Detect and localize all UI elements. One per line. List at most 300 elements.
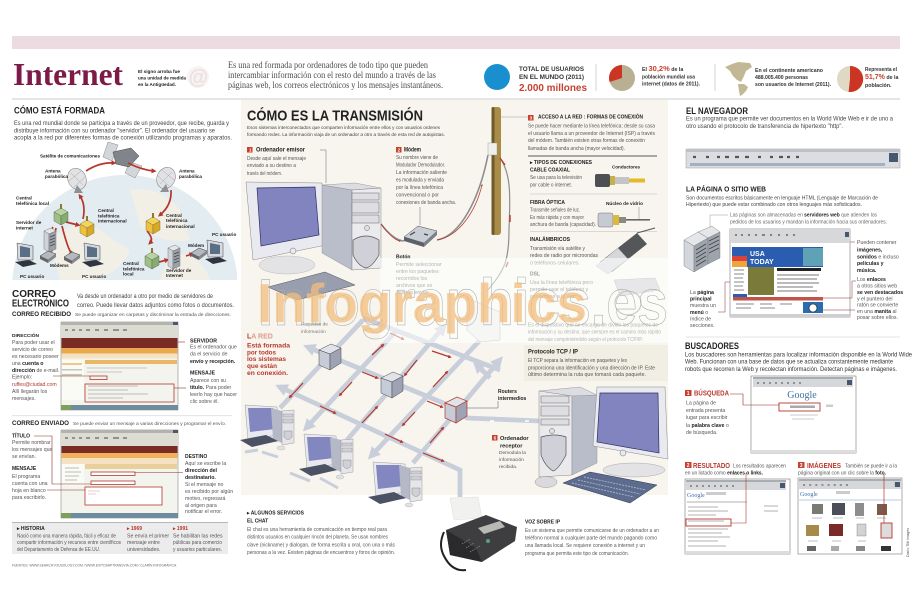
screenshot: inbox xyxy=(61,322,178,410)
text: el chat: El chat es una herramienta de comunicación en tiempo real para xyxy=(247,527,387,533)
step 1: búsqueda xyxy=(685,388,779,436)
step 2: módem text: es modulada y enviada xyxy=(396,178,444,184)
connection: inalámbricos: INALÁMBRICOS xyxy=(530,236,571,243)
diagram labels: internacional xyxy=(166,224,195,229)
text: links: se ven destacados xyxy=(857,290,903,296)
screenshot: compose xyxy=(61,430,178,518)
callout: título xyxy=(12,432,52,460)
step 3: access text: el usuario llama a un proveedor de Internet (ISP) a través xyxy=(528,131,655,137)
text: home page: índice de xyxy=(690,316,711,322)
connection: fibra óptica: FIBRA ÓPTICA xyxy=(530,198,565,206)
la red label: que están xyxy=(247,363,277,370)
stat: Americas users: 488.005.400 personas xyxy=(755,75,808,81)
callout: mensaje: El programa xyxy=(12,474,40,480)
diagram labels: Central xyxy=(166,213,182,218)
heading: EL NAVEGADOR xyxy=(686,106,748,117)
router text: Es el dispositivo que se encarga de dividir los paquetes de xyxy=(528,322,658,328)
screenshot: google home: Google xyxy=(787,390,817,401)
subheading: correo enviado: Se puede enviar un mensaje a varias direcciones y programar el envío. xyxy=(73,421,226,427)
network: client computers xyxy=(240,405,422,507)
1991 milestone xyxy=(172,526,223,553)
1969 milestone xyxy=(126,526,169,553)
panel: buscadores xyxy=(685,341,913,557)
leader lines xyxy=(34,436,183,490)
screenshot: results xyxy=(685,473,790,554)
connection: fibra óptica xyxy=(530,198,650,228)
step 3: access text: 3 xyxy=(530,116,533,121)
diagram labels: PC usuario xyxy=(20,274,44,279)
callout: destino: dirección del xyxy=(185,468,218,474)
callout: servidor: Es el ordenador que xyxy=(190,344,237,350)
text: voz sobre IP: VOZ SOBRE IP xyxy=(525,520,561,526)
connection: DSL xyxy=(530,272,660,315)
red link arrows xyxy=(50,163,192,262)
step 1: búsqueda: 1 xyxy=(687,391,690,397)
diagram labels: Internet xyxy=(16,226,33,230)
utility pole xyxy=(488,107,528,235)
router text: información y su destino, que siempre es el camino más rápido xyxy=(528,330,661,336)
text xyxy=(686,196,878,208)
text: contents: películas y xyxy=(857,261,884,267)
icon: parabolic antennas xyxy=(64,164,179,193)
callout: mensaje xyxy=(12,466,48,501)
text: el chat: clave (nickname) y dialogan, de forma escrita u oral, con una o más xyxy=(247,542,395,548)
historia text: Nació como una manera rápida, fácil y eficaz de xyxy=(17,534,116,540)
1969 milestone: universidades. xyxy=(127,547,160,553)
icon: blue circle xyxy=(484,64,510,90)
building box at end of route xyxy=(467,298,500,342)
step 2: resultado xyxy=(685,462,786,476)
1969 milestone: Se envía el primer xyxy=(127,534,169,540)
diagram labels: Central xyxy=(123,261,139,266)
diagram labels: Internet xyxy=(166,273,183,278)
keyboard xyxy=(268,272,355,300)
text xyxy=(686,116,894,130)
connection: fibra óptica: anchura de banda (capacidad). xyxy=(530,222,596,228)
stat: total users xyxy=(484,64,587,94)
mouse xyxy=(535,476,557,488)
connection: fibra óptica: Es más rápida y con mayor xyxy=(530,215,584,221)
text: links: posar sobre ellos. xyxy=(857,315,898,321)
callout: título: TÍTULO xyxy=(12,432,30,440)
callout: servidor xyxy=(190,338,237,365)
text: voz sobre IP: Es un sistema que permite comunicarse de un ordenador a un xyxy=(525,528,659,534)
intro: formando redes. La información viaja de un ordenador a otro a través de esta red de autopistas. xyxy=(247,132,445,138)
tower xyxy=(539,387,597,398)
globe xyxy=(12,175,237,280)
step 1: búsqueda: entrada presenta xyxy=(686,408,725,414)
screenshot: news page: TODAY xyxy=(750,259,774,266)
text: el chat: ▸ ALGUNOS SERVICIOS xyxy=(246,510,305,516)
stat: world share pie xyxy=(609,64,701,91)
intro text: intercambiar información con el resto del mundo a través de las xyxy=(228,70,436,81)
step 1: búsqueda: lugar para escribir xyxy=(686,415,728,421)
step 2: resultado: en un listado como enlaces o links. xyxy=(685,470,764,476)
icon: map of the Americas xyxy=(725,62,752,96)
text: voz sobre IP: programa que permita este tipo de comunicación. xyxy=(525,551,629,557)
intro paragraph xyxy=(14,120,232,142)
label: routers intermedios: intermedios xyxy=(498,396,527,402)
router text: del mensaje comprimiéndolo según el protocolo TCP/IP. xyxy=(528,337,643,343)
step 2: módem text: Modulador Demodulador. xyxy=(396,162,445,168)
icon: at sign: @ xyxy=(188,67,208,89)
heading: LA PÁGINA O SITIO WEB xyxy=(686,184,767,194)
connection: cable coaxial: CABLE COAXIAL xyxy=(530,168,570,174)
callout: dirección: es necesario poseer xyxy=(12,354,59,360)
diagram: satellite network xyxy=(12,142,237,280)
callout: mensaje: MENSAJE xyxy=(12,466,37,472)
panel: protocolo TCP/IP xyxy=(524,345,668,381)
photo credit: Diario TMI Images xyxy=(906,528,910,557)
text: Son documentos escritos básicamente en lenguaje HTML (Lenguaje de Marcación de xyxy=(686,196,878,202)
text: otro usando el protocolo de transferencia de hipertexto "http". xyxy=(686,124,843,130)
1991 milestone: y usuarios particulares. xyxy=(173,547,222,553)
text: contents xyxy=(857,240,899,274)
step 3: access text xyxy=(528,113,655,152)
callout: destino: es recibido por algún xyxy=(185,489,233,495)
text: links xyxy=(857,277,903,321)
text xyxy=(685,352,913,373)
big computer: sender xyxy=(246,182,381,300)
callout: mensaje: MENSAJE xyxy=(190,370,216,376)
heading: CORREO xyxy=(12,289,56,300)
connection: inalámbricos: Transmisión vía satélite y xyxy=(530,246,585,252)
step 1: ordenador emisor text: través del módem. xyxy=(247,171,282,177)
connection: inalámbricos: o teléfonos celulares. xyxy=(530,260,580,266)
heading xyxy=(12,289,69,310)
subheading: correo recibido xyxy=(12,311,231,318)
intro paragraph: acopla a la red por diferentes formas de conexión utilizando programas y aparatos. xyxy=(14,134,232,142)
diagram labels: Satélite de comunicaciones xyxy=(40,154,100,158)
connection: cable coaxial xyxy=(529,160,645,188)
text: contents: música. xyxy=(857,268,877,274)
step 1: búsqueda: la palabra clave o xyxy=(686,423,729,429)
connection: DSL: permite usar el teléfono y xyxy=(530,287,589,293)
icon: modem xyxy=(404,226,437,247)
diagram labels: Módem xyxy=(188,243,204,248)
text: home page: principal xyxy=(690,296,712,302)
text: servers: Las páginas son almacenadas en servidores web que atienden los xyxy=(730,212,877,218)
diagram labels: Servidor de xyxy=(166,268,192,273)
icon: fiber cable xyxy=(598,207,650,227)
step: ordenador receptor text: Ordenador xyxy=(500,436,529,442)
diagram labels: parabólica xyxy=(45,174,68,179)
text: contents: sonidos e incluso xyxy=(857,254,899,260)
step: ordenador receptor text: Demodula la xyxy=(499,450,526,456)
tower xyxy=(322,183,381,190)
text: links: Los enlaces xyxy=(857,277,886,283)
cable from pole xyxy=(487,158,510,291)
big computer: receiver xyxy=(490,387,668,503)
callout: mensaje: cuenta con una xyxy=(12,481,48,487)
step 1: búsqueda: La página de xyxy=(686,400,716,406)
text: voz sobre IP: una llamada local. Se requiere conexión a internet y un xyxy=(525,543,645,549)
stat: Americas users: En el continente americano xyxy=(755,68,824,74)
label: botón: entre los paquetes xyxy=(396,269,439,275)
icon: coaxial cable xyxy=(595,174,645,187)
la red label: Está formada xyxy=(247,342,291,350)
callout: dirección: Ejemplo: xyxy=(12,374,32,380)
text: links: en una manita al xyxy=(857,309,897,315)
stat: total users: EN EL MUNDO (2011) xyxy=(519,74,584,81)
screenshot: news page: USA xyxy=(750,251,765,258)
label: botón: recorridos los xyxy=(396,276,428,282)
network: gray routes xyxy=(280,318,540,497)
text: servers: pedidos de los usuarios y mandan la información hacia sus ordenadores. xyxy=(730,220,887,226)
watermark: Infographics xyxy=(257,272,587,334)
router text xyxy=(528,322,661,343)
diagram labels: Central xyxy=(16,196,32,200)
callout: destino: motivo, regresará xyxy=(185,496,225,502)
route dashes xyxy=(490,420,529,422)
label: botón: Permite seleccionar xyxy=(396,262,442,268)
diagram labels: Servidor de xyxy=(16,220,42,225)
text: Hipertexto) que puede estar combinado con otros lenguajes más sofisticados. xyxy=(686,202,862,208)
connection: fibra óptica: Transmite señales de luz. xyxy=(530,208,580,214)
stat: Americas users xyxy=(755,68,831,88)
screenshot: news page xyxy=(730,229,850,317)
label: routers intermedios xyxy=(467,389,527,408)
callout: mensaje: Aparece con su xyxy=(190,378,226,384)
intro xyxy=(77,293,234,309)
icon: fax machine xyxy=(441,497,517,570)
connection: cable coaxial: Se usa para la televisión xyxy=(530,175,582,181)
step: ordenador receptor text: información xyxy=(499,457,524,463)
text: contents: imágenes, xyxy=(857,248,883,254)
la red label: LA RED xyxy=(247,334,273,340)
connection: inalámbricos xyxy=(530,228,655,274)
base xyxy=(259,256,315,274)
1969 milestone: ▸ 1969 xyxy=(126,526,142,532)
callout: mensaje: título. Para poder xyxy=(190,385,232,391)
text: Es un programa que permite ver documentos en la World Wide Web e ir de uno a xyxy=(686,116,894,122)
text: links: ratón se convierte xyxy=(857,302,898,308)
callout: destino: Si el mensaje no xyxy=(185,482,223,488)
label: paquetes de información: información xyxy=(301,329,326,335)
historia text: del Departamento de Defensa de EE.UU. xyxy=(17,547,100,553)
la red label: en conexión. xyxy=(247,370,288,377)
callout: dirección: DIRECCIÓN xyxy=(12,331,39,339)
text: home page xyxy=(690,290,716,329)
screenshot: browser bar xyxy=(686,149,900,168)
step 2: módem text: Su nombre viene de xyxy=(396,155,438,161)
diagram labels: telefónica xyxy=(123,266,145,272)
intro text: Es una red formada por ordenadores de todo tipo que pueden xyxy=(228,60,428,71)
panel: protocolo TCP/IP: Protocolo TCP / IP xyxy=(528,348,578,356)
text: voz sobre IP: teléfono normal a cualquier parte del mundo pagando como xyxy=(525,536,657,542)
step 3: imágenes: También se puede ir a la xyxy=(845,464,897,470)
monitor xyxy=(593,387,668,459)
text: voz sobre IP xyxy=(525,520,659,557)
intro paragraph: distribuye información con su ordenador "servidor". El ordenador del usuario se xyxy=(14,128,215,134)
diagram labels: telefónica local xyxy=(16,201,49,206)
panel: la página o sitio web xyxy=(684,184,903,329)
step: ordenador receptor text: 5 xyxy=(494,436,497,441)
diagram labels: PC usuario xyxy=(82,274,106,279)
diagram labels: internacional xyxy=(98,218,127,224)
step 2: resultado: 2 xyxy=(687,463,690,469)
step 3: imágenes: 3 xyxy=(800,463,803,469)
callout: dirección: Para poder usar el xyxy=(12,340,55,346)
step 1: ordenador emisor text: Desde aquí sale el mensaje xyxy=(247,156,306,162)
1991 milestone: ▸ 1991 xyxy=(172,526,188,532)
label: botón: desean enviar. xyxy=(396,290,430,296)
intro: Esos sistemas interconectados que comparten información entre ellos y con usuarios ordenes xyxy=(247,125,441,131)
satellite xyxy=(103,142,142,178)
text: links: a otros sitios web xyxy=(857,284,897,290)
step 2: módem text xyxy=(396,146,456,206)
screenshot: image results xyxy=(798,473,902,554)
panel: el navegador xyxy=(686,106,900,168)
callout: dirección: Allí llegarán los xyxy=(12,389,48,395)
icon: web servers xyxy=(684,215,728,272)
step: ordenador receptor text: recibida. xyxy=(499,464,517,470)
text: links: y el puntero del xyxy=(857,296,892,302)
label: paquetes de información xyxy=(301,322,328,335)
text: home page: muestra un xyxy=(690,303,716,309)
stat: world share pie: población mundial usa xyxy=(642,74,695,80)
icon: splitter xyxy=(614,278,660,315)
step 1: búsqueda: de búsqueda. xyxy=(686,430,717,436)
intro paragraph: Es una red mundial donde se participa a través de un proveedor, que recibe, guarda y xyxy=(14,120,230,127)
callout: dirección: servicio de correo xyxy=(12,347,53,353)
callout: mensaje: hoja en blanco xyxy=(12,488,46,494)
screenshot: results: Google xyxy=(687,493,705,499)
callout: dirección xyxy=(12,331,59,402)
callout: mensaje: para escribirlo. xyxy=(12,495,46,501)
callout: destino: destinatario. xyxy=(185,475,216,481)
step 3: access text: ACCESO A LA RED : FORMAS DE CONEXIÓN xyxy=(538,113,643,121)
subheading: correo enviado: CORREO ENVIADO xyxy=(12,420,69,427)
text: servers xyxy=(730,212,887,226)
callout: mensaje: clic sobre él. xyxy=(190,399,219,405)
note: arroba origin: El signo arroba fue xyxy=(138,69,180,74)
leader lines xyxy=(53,342,186,388)
heading: CÓMO ESTÁ FORMADA xyxy=(14,104,105,116)
callout: servidor: da el servicio de xyxy=(190,352,228,358)
historia text xyxy=(16,526,121,553)
step 3: imágenes xyxy=(798,461,897,476)
intro: correo. Puede llevar datos adjuntos como fotos o documentos. xyxy=(77,302,234,309)
label: routers intermedios: Routers xyxy=(498,389,517,395)
step 1: ordenador emisor text xyxy=(247,146,306,177)
note: arroba origin: una unidad de medida xyxy=(138,76,186,80)
diagram labels: Módems xyxy=(50,263,69,268)
stat: Americas share pie: Representa el xyxy=(865,67,897,73)
callout: dirección: dirección de e-mail. xyxy=(12,368,59,374)
step 3: imágenes: IMÁGENES xyxy=(807,461,841,470)
callout: destino xyxy=(185,454,233,515)
la red label: los sistemas xyxy=(247,356,287,363)
text: el chat: personas a la vez. Existen páginas de encuentros y foros de opinión. xyxy=(247,550,395,556)
diagram labels: telefónica xyxy=(98,214,120,218)
heading: CÓMO ES LA TRANSMISIÓN xyxy=(247,107,423,125)
step 1: ordenador emisor text: Ordenador emisor xyxy=(256,146,305,154)
heading: ELECTRÓNICO xyxy=(12,296,69,310)
text: Web. Funcionan con una base de datos que se actualiza constantemente mediante xyxy=(685,360,894,366)
connection: DSL: Usa la línea telefónica pero xyxy=(530,280,593,286)
callout: destino: notificar el error. xyxy=(185,509,222,515)
sources: FUENTES: WWW.SEARCHYOUSOLOGY.COM / WWW.EXITOSAPTRANSVIA.COM / CLARÍN INFOGRÁFICA. xyxy=(12,564,177,568)
stat: world share pie: internet (datos de 2011). xyxy=(642,82,701,88)
stat: Americas share pie: población. xyxy=(865,83,892,89)
subheading: correo recibido: CORREO RECIBIDO xyxy=(12,311,71,318)
step 1: búsqueda: BÚSQUEDA xyxy=(694,388,729,398)
diagram labels: parabólica xyxy=(179,174,202,179)
panel: protocolo TCP/IP: último determina la ruta que tomará cada paquete. xyxy=(528,372,646,378)
text: el chat xyxy=(246,510,395,556)
step 3: access text: llamadas de banda ancha (mayor velocidad). xyxy=(528,146,625,152)
connection: DSL: conectarse a la vez. xyxy=(530,294,576,300)
connection: cable coaxial: Conductores xyxy=(612,164,640,170)
callout: destino: Aquí se escribe la xyxy=(185,461,226,467)
screenshot: image results: Google xyxy=(800,492,818,498)
historia text: ▸ HISTORIA xyxy=(16,526,45,532)
panel: correo electrónico xyxy=(12,289,237,568)
panel: cómo es la transmisión xyxy=(240,107,668,570)
top pink band xyxy=(12,36,900,49)
callout: título: los mensajes que xyxy=(12,447,52,453)
step 2: módem text: 2 xyxy=(398,148,401,153)
connection: fibra óptica: Núcleo de vidrio xyxy=(606,201,643,206)
intro: Va desde un ordenador a otro por medio de servidores de xyxy=(77,293,213,300)
intro xyxy=(247,125,445,138)
connection: cable coaxial: ▸ TIPOS DE CONEXIONES xyxy=(529,160,593,166)
step 2: módem text: convencional o por xyxy=(396,192,439,198)
1991 milestone: Se habilitan las redes xyxy=(173,534,223,540)
text: home page: secciones. xyxy=(690,323,715,329)
connection: inalámbricos: redes de radio por microondas xyxy=(530,253,598,259)
historia text: compartir información y recursos entre científicos xyxy=(17,540,121,546)
text: home page: La página xyxy=(690,290,714,296)
callout: título: Permite nombrar xyxy=(12,440,51,446)
label: botón: archivos que se xyxy=(396,283,432,289)
diagram labels: Antena xyxy=(45,168,61,174)
step: ordenador receptor text xyxy=(492,435,529,470)
cable with modem xyxy=(381,155,488,247)
note: arroba origin: en la Antigüedad. xyxy=(138,82,176,87)
stat label: TOTAL DE USUARIOS xyxy=(519,66,584,73)
diagram labels: PC usuario xyxy=(212,232,236,237)
label: paquetes de información: Paquetes de xyxy=(301,322,328,328)
watermark band xyxy=(380,258,668,343)
intro text: páginas web, los correos electrónicos y los mensajes instantáneos. xyxy=(228,80,443,91)
stat: total users: 2.000 millones xyxy=(519,82,587,94)
subheading: correo enviado xyxy=(12,420,226,427)
step 2: resultado: Los resultados aparecen xyxy=(733,464,786,470)
callout: destino: al origen para xyxy=(185,503,217,509)
la red label xyxy=(247,334,291,377)
la red label: por todos xyxy=(247,350,277,356)
1969 milestone: mensaje entre xyxy=(127,540,160,546)
step 2: módem text: conexiones de banda ancha. xyxy=(396,200,456,206)
callout: mensaje: leerlo hay que hacer xyxy=(190,392,237,398)
step 2: módem text: por la línea telefónica xyxy=(396,185,443,191)
step 3: access text: del módem. También existen otras formas de conexión xyxy=(528,138,645,144)
callout: servidor: SERVIDOR xyxy=(190,338,217,344)
keyboard xyxy=(563,472,657,503)
text: home page: menú o xyxy=(690,310,708,316)
icon: mobile phone xyxy=(596,228,655,274)
panel: protocolo TCP/IP: proporciona una identificación y una dirección de IP. Este xyxy=(528,366,655,372)
text: contents: Pueden contener xyxy=(857,240,897,246)
callout: título: se envían. xyxy=(12,454,36,460)
note: arroba origin xyxy=(138,69,186,87)
callout: destino: DESTINO xyxy=(185,454,207,460)
text: Los buscadores son herramientas para localizar información disponible en la World Wide xyxy=(685,352,913,358)
diagram labels: telefónica xyxy=(166,218,188,223)
text: el chat: distintos usuarios en cualquier rincón del planeta. Se usan nombres xyxy=(247,534,388,540)
